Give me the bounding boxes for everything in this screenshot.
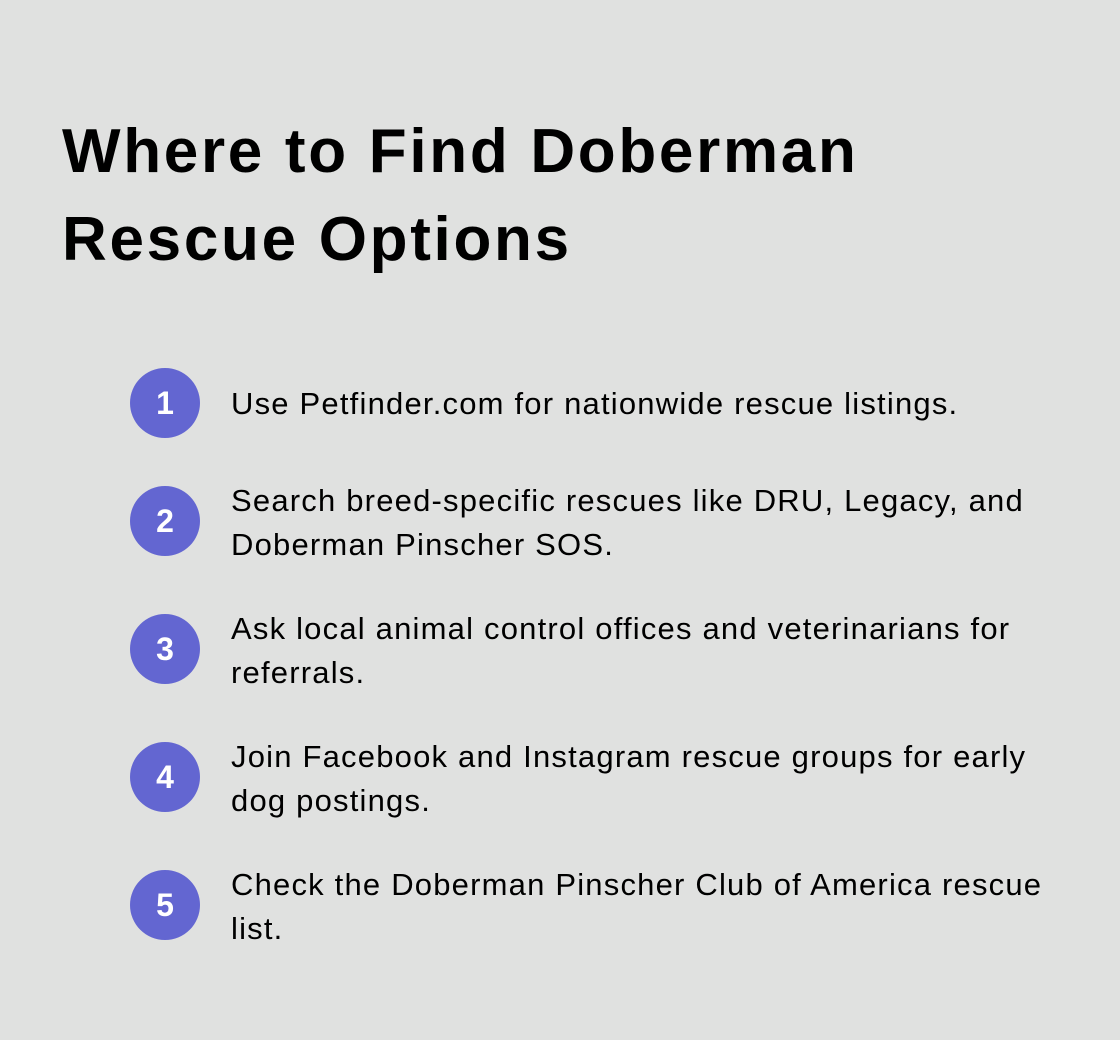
- icon: number 2: 2: [156, 503, 174, 539]
- text 2: [231, 483, 1024, 562]
- text 3: Ask local animal control offices and veterinarians for: [231, 611, 1010, 646]
- item 2: [130, 483, 1024, 562]
- title: Where to Find Doberman: [62, 117, 859, 186]
- icon: number 5: [130, 870, 200, 940]
- text 2: Search breed-specific rescues like DRU, Legacy, and: [231, 483, 1024, 518]
- title: [62, 117, 859, 274]
- item 1: [130, 368, 958, 438]
- text 4: [231, 739, 1026, 818]
- icon: number 5: 5: [156, 887, 174, 923]
- title: Rescue Options: [62, 205, 572, 274]
- text 4: Join Facebook and Instagram rescue groups for early: [231, 739, 1026, 774]
- item 4: [130, 739, 1026, 818]
- icon: number 4: 4: [156, 759, 174, 795]
- icon: number 3: 3: [156, 631, 174, 667]
- text 4: dog postings.: [231, 783, 431, 818]
- item 3: [130, 611, 1010, 690]
- text 5: Check the Doberman Pinscher Club of America rescue: [231, 867, 1042, 902]
- icon: number 4: [130, 742, 200, 812]
- text 3: [231, 611, 1010, 690]
- icon: number 2: [130, 486, 200, 556]
- icon: number 1: 1: [156, 385, 174, 421]
- text 5: [231, 867, 1042, 946]
- text 3: referrals.: [231, 655, 365, 690]
- item 5: [130, 867, 1042, 946]
- icon: number 3: [130, 614, 200, 684]
- text 2: Doberman Pinscher SOS.: [231, 527, 614, 562]
- text 5: list.: [231, 911, 284, 946]
- icon: number 1: [130, 368, 200, 438]
- text 1: Use Petfinder.com for nationwide rescue listings.: [231, 386, 958, 421]
